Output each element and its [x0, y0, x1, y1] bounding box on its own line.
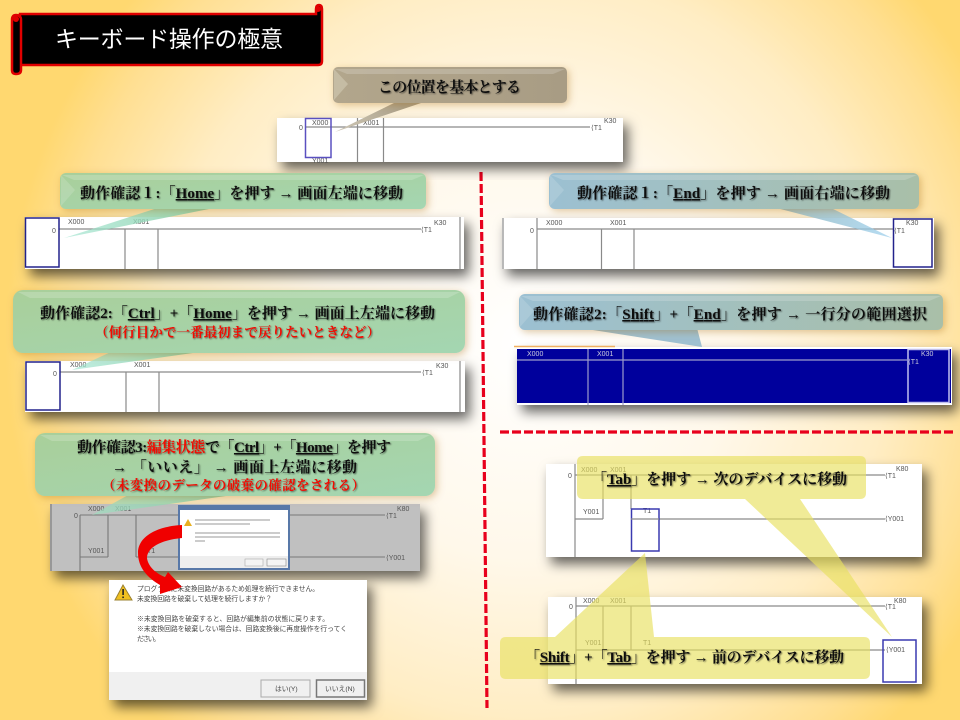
ladder screenshot: editing state, dimmed: [50, 504, 420, 571]
ladder screenshot: editing state, dimmed: 0: [74, 513, 78, 520]
ladder screenshot: End: ⟨T1: [894, 227, 905, 235]
callout: Home: [60, 173, 426, 238]
callout: edit state Ctrl+Home: 動作確認3:編集状態で「Ctrl」+「Home」を押す: [77, 438, 391, 456]
callout: Shift+End: 動作確認2:「Shift」+「End」を押す → 一行分の範囲選択: [533, 305, 927, 323]
ladder screenshot: Ctrl+Home: X001: [134, 362, 150, 369]
callout: edit state Ctrl+Home: （未変換のデータの破棄の確認をされる）: [102, 477, 365, 493]
ladder screenshot: editing state, dimmed: T1: [147, 548, 155, 555]
ladder screenshot: base position: X001: [363, 120, 379, 127]
callout: edit state Ctrl+Home: [35, 433, 435, 515]
ladder screenshot: Shift+End selected range: ⟨T1: [908, 358, 919, 366]
title: キーボード操作の極意: [55, 26, 283, 52]
ladder screenshot: base position: [277, 118, 623, 165]
ladder screenshot: Tab: K80: [896, 466, 909, 473]
ladder screenshot: editing state, dimmed: ⟨T1: [386, 512, 397, 520]
ladder screenshot: Shift+End selected range: X001: [597, 351, 613, 358]
dialog message: [137, 584, 347, 643]
ladder screenshot: Ctrl+Home: X000: [70, 362, 86, 369]
button: yes: はい(Y): [275, 685, 298, 693]
ladder screenshot: Tab: 0: [568, 473, 572, 480]
ladder screenshot: Shift+Tab: Y001: [585, 640, 601, 647]
ladder screenshot: Shift+Tab: K80: [894, 598, 907, 605]
button: no: いいえ(N): [325, 685, 355, 693]
ladder screenshot: Ctrl+Home: ⟨T1: [422, 369, 433, 377]
ladder screenshot: Shift+Tab: X000: [583, 598, 599, 605]
callout: Ctrl+Home: （何行目かで一番最初まで戻りたいときなど）: [95, 324, 380, 340]
ladder screenshot: End: 0: [530, 228, 534, 235]
ladder screenshot: Home: X001: [133, 219, 149, 226]
dialog message: ※未変換回路を破棄しない場合は、回路変換後に再度操作を行ってく: [137, 624, 347, 633]
ladder screenshot: editing state, dimmed: X001: [115, 506, 131, 513]
callout: Shift+Tab: [500, 553, 870, 679]
dialog message: プログラムに未変換回路があるため処理を続行できません。: [137, 584, 319, 593]
callout: Home: 動作確認１:「Home」を押す → 画面左端に移動: [80, 184, 403, 202]
ladder screenshot: Shift+End selected range: [514, 346, 952, 405]
callout: edit state Ctrl+Home: → 「いいえ」 → 画面上左端に移動: [112, 458, 357, 476]
ladder screenshot: base position: K30: [604, 118, 617, 125]
ladder screenshot: editing state, dimmed: Y001: [88, 548, 104, 555]
ladder screenshot: Ctrl+Home: 0: [53, 371, 57, 378]
dashed divider: horizontal: [500, 430, 956, 434]
ladder screenshot: Shift+Tab: ⟨Y001: [886, 646, 905, 654]
dialog: unconverted circuit warning: [109, 580, 367, 700]
small confirmation dialog: [178, 505, 290, 570]
title banner: [12, 5, 322, 74]
ladder screenshot: Home: [25, 217, 464, 269]
ladder screenshot: Home: ⟨T1: [421, 226, 432, 234]
arrow: curved red: [138, 525, 182, 594]
callout: Ctrl+Home: 動作確認2:「Ctrl」+「Home」を押す → 画面上左端に移動: [40, 304, 435, 322]
dashed divider: vertical: [481, 172, 487, 708]
ladder screenshot: Shift+End selected range: X000: [527, 351, 543, 358]
button: yes: [261, 680, 310, 697]
dialog message: ※未変換回路を破棄すると、回路が編集前の状態に戻ります。: [137, 614, 329, 623]
ladder screenshot: Shift+End selected range: K30: [921, 351, 934, 358]
callout: End: [549, 173, 919, 238]
ladder screenshot: base position: X000: [312, 120, 328, 127]
ladder screenshot: End: [502, 218, 934, 269]
ladder screenshot: base position: Y001: [312, 158, 328, 165]
callout: Tab: 「Tab」を押す → 次のデバイスに移動: [592, 470, 847, 488]
ladder screenshot: Tab: X000: [581, 467, 597, 474]
ladder screenshot: base position: 0: [299, 125, 303, 132]
ladder screenshot: base position: ⟨T1: [591, 124, 602, 132]
callout: Tab: [577, 456, 892, 637]
ladder screenshot: Home: X000: [68, 219, 84, 226]
ladder screenshot: Shift+Tab: [548, 597, 922, 684]
dialog message: ださい。: [137, 635, 160, 643]
ladder screenshot: Tab: Y001: [583, 509, 599, 516]
ladder screenshot: Shift+Tab: 0: [569, 604, 573, 611]
ladder screenshot: Tab: ⟨T1: [885, 472, 896, 480]
callout: End: 動作確認１:「End」を押す → 画面右端に移動: [577, 184, 890, 202]
callout: Shift+Tab: 「Shift」+「Tab」を押す → 前のデバイスに移動: [525, 648, 844, 666]
ladder screenshot: End: X001: [610, 220, 626, 227]
ladder screenshot: Tab: ⟨Y001: [885, 515, 904, 523]
ladder screenshot: Shift+Tab: X001: [610, 598, 626, 605]
ladder screenshot: Home: 0: [52, 228, 56, 235]
ladder screenshot: Tab: [546, 464, 922, 557]
callout: Shift+End: [519, 294, 943, 347]
ladder screenshot: Shift+Tab: T1: [643, 640, 651, 647]
ladder screenshot: Shift+Tab: ⟨T1: [885, 603, 896, 611]
ladder screenshot: End: X000: [546, 220, 562, 227]
callout: Ctrl+Home: [13, 290, 465, 370]
ladder screenshot: editing state, dimmed: X000: [88, 506, 104, 513]
ladder screenshot: editing state, dimmed: ⟨Y001: [386, 554, 405, 562]
dialog message: 未変換回路を破棄して処理を続行しますか？: [137, 594, 272, 603]
ladder screenshot: editing state, dimmed: K80: [397, 506, 410, 513]
ladder screenshot: Tab: T1: [643, 508, 651, 515]
ladder screenshot: Home: K30: [434, 220, 447, 227]
ladder screenshot: Tab: X001: [610, 467, 626, 474]
callout: base position: この位置を基本とする: [378, 78, 521, 96]
ladder screenshot: End: K30: [906, 220, 919, 227]
button: no: [316, 680, 364, 697]
icon: warning triangle: [115, 585, 132, 600]
callout: base position: [333, 67, 567, 132]
ladder screenshot: Ctrl+Home: K30: [436, 363, 449, 370]
ladder screenshot: Ctrl+Home: [25, 361, 465, 412]
